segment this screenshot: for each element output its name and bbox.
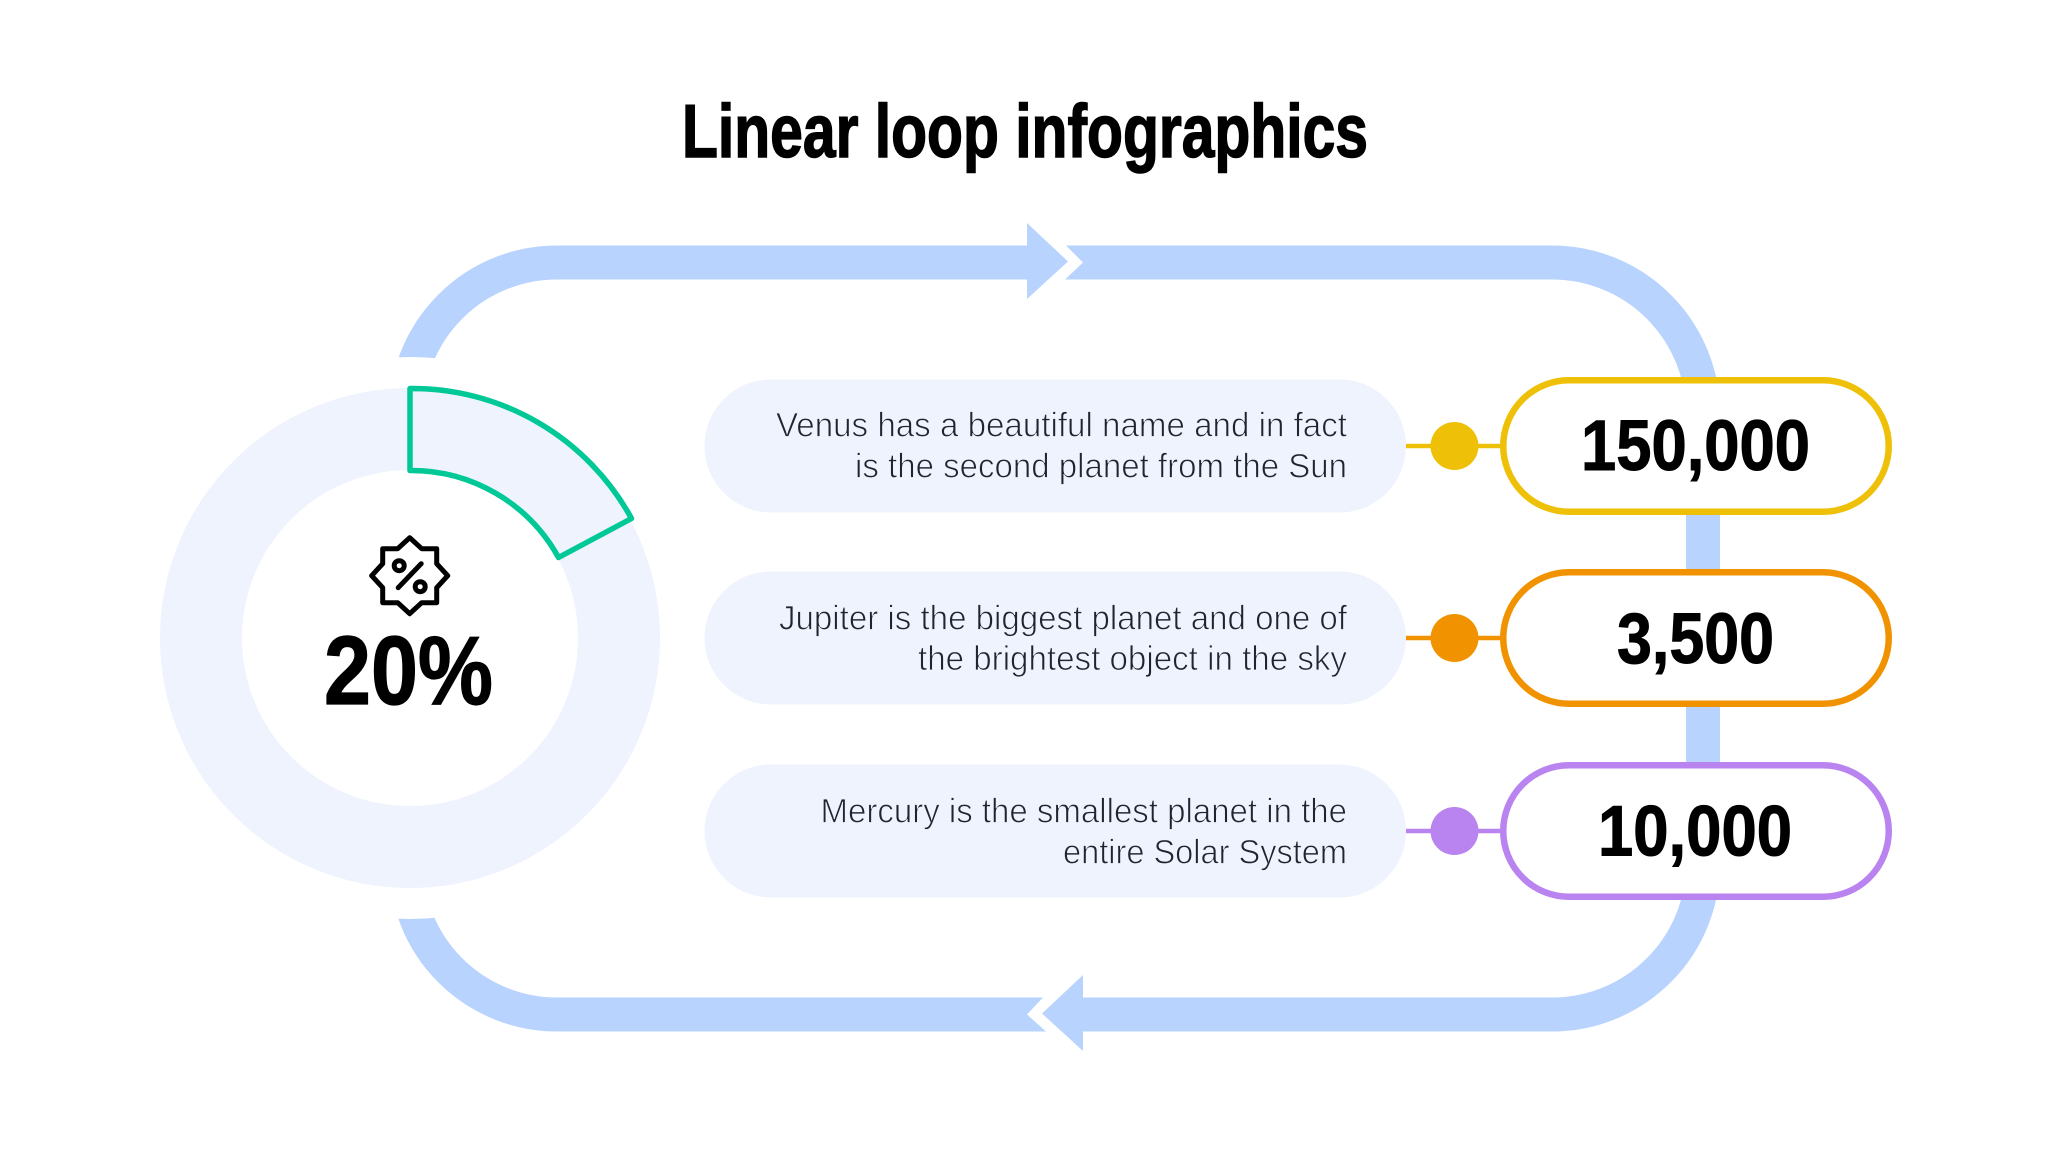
value pill: 150,000: [1503, 380, 1889, 512]
donut chart: [201, 388, 632, 847]
description pill: Mercury: Mercury is the smallest planet in the: [820, 792, 1347, 830]
value pill: 150,000: 150,000: [1581, 407, 1810, 486]
connector dot: purple: [1406, 807, 1502, 855]
description pill: Jupiter: Jupiter is the biggest planet and one of: [779, 599, 1348, 637]
row: Mercury: [704, 764, 1889, 898]
bottom-left loop segment: [406, 864, 1046, 1032]
value pill: 10,000: [1503, 765, 1889, 897]
row: Venus: [704, 380, 1889, 512]
icon: percent badge: [372, 538, 448, 614]
title: Linear loop infographics: [682, 89, 1368, 173]
row: Jupiter: [704, 572, 1889, 704]
description pill: Mercury: entire Solar System: [1063, 833, 1347, 871]
description pill: Jupiter: [704, 572, 1406, 704]
description pill: Venus: [704, 380, 1406, 512]
description pill: Venus: is the second planet from the Sun: [855, 447, 1347, 485]
arrow: bottom, pointing left: [1042, 975, 1083, 1051]
description pill: Jupiter: the brightest object in the sky: [918, 640, 1347, 678]
donut ring: [201, 429, 619, 847]
value pill: 10,000: 10,000: [1598, 792, 1792, 872]
top-left loop segment: [406, 262, 1030, 414]
highlighted 20% segment: [410, 388, 632, 558]
donut value: 20%: [324, 616, 493, 725]
arrow: top, pointing right: [1027, 223, 1068, 299]
value pill: 3,500: [1503, 572, 1889, 704]
right loop segment: [1065, 246, 1703, 1014]
description pill: Mercury: [704, 764, 1406, 898]
description pill: Venus: Venus has a beautiful name and in fact: [776, 407, 1348, 445]
connector dot: yellow: [1406, 422, 1502, 470]
loop track with arrows: [406, 223, 1703, 1051]
value pill: 3,500: 3,500: [1617, 600, 1774, 679]
connector dot: orange: [1406, 614, 1502, 662]
